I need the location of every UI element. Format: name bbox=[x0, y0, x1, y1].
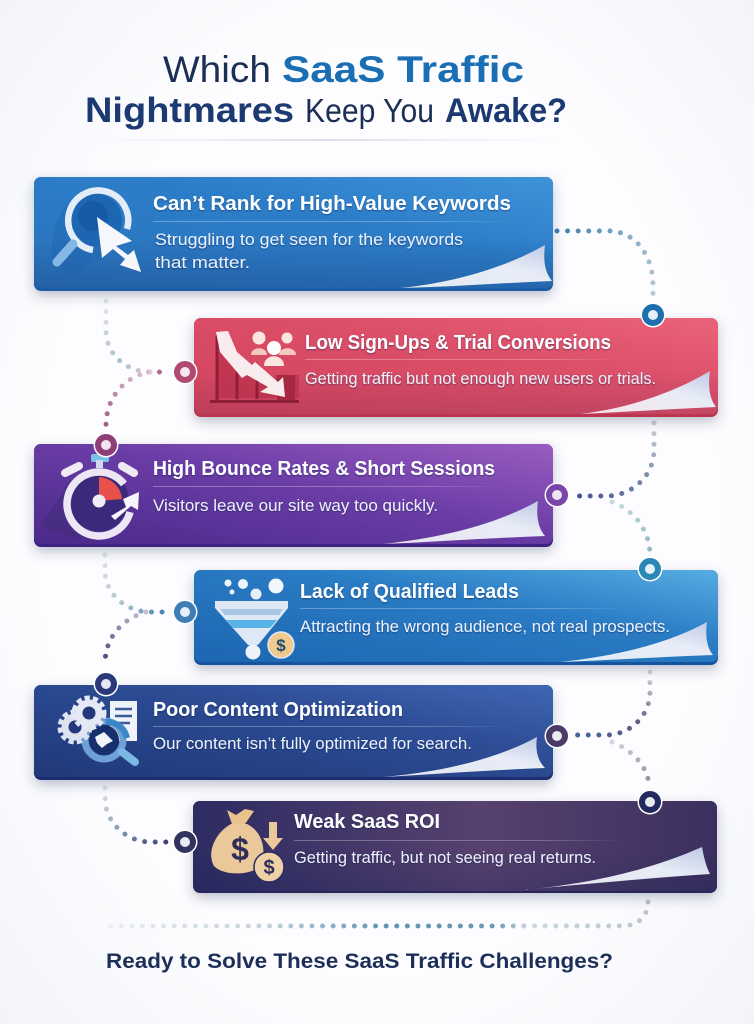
node: card 6 left bbox=[172, 830, 198, 854]
title: SaaS Traffic bbox=[282, 49, 524, 90]
connector: card 5 to card 6 left node bbox=[105, 788, 168, 842]
connector: card 3 to card 4 left node bbox=[105, 555, 168, 612]
title: Nightmares bbox=[85, 91, 294, 130]
description: Attracting the wrong audience, not real prospects. bbox=[300, 618, 670, 636]
description: Our content isn’t fully optimized for search. bbox=[153, 735, 472, 753]
heading: Can’t Rank for High-Value Keywords bbox=[153, 193, 511, 215]
node: card 5 right bbox=[544, 724, 570, 748]
panel: weak saas roi bbox=[193, 801, 717, 893]
connector: card 1 to card 2 left node bbox=[106, 301, 168, 372]
description: Getting traffic, but not seeing real returns. bbox=[294, 849, 596, 867]
icon: magnifier and cursor bbox=[52, 190, 141, 276]
panel: low sign-ups bbox=[194, 318, 718, 417]
closing question: Ready to Solve These SaaS Traffic Challenges? bbox=[106, 950, 613, 973]
connector: card 2 to card 3 right node bbox=[577, 423, 654, 496]
node: card 2 top bbox=[640, 302, 666, 328]
heading: Poor Content Optimization bbox=[153, 699, 403, 721]
title bbox=[85, 49, 567, 141]
heading: Lack of Qualified Leads bbox=[300, 581, 519, 603]
coin symbol: $ bbox=[276, 636, 286, 655]
description: Visitors leave our site way too quickly. bbox=[153, 497, 438, 515]
panel: can't rank bbox=[34, 177, 553, 291]
description: that matter. bbox=[155, 254, 250, 272]
panel: high bounce rates bbox=[34, 444, 553, 547]
description: Getting traffic but not enough new users or trials. bbox=[305, 370, 656, 388]
panel: qualified leads bbox=[194, 570, 718, 665]
heading: Weak SaaS ROI bbox=[294, 811, 440, 833]
node: card 4 top bbox=[638, 556, 662, 582]
connector: card 1 to card 2 bbox=[557, 231, 653, 300]
title: Awake? bbox=[445, 92, 567, 130]
heading: Low Sign-Ups & Trial Conversions bbox=[305, 332, 611, 354]
icon: falling chart and people bbox=[210, 331, 299, 403]
icon: funnel with coin bbox=[215, 578, 294, 660]
icon: gears, document and magnifier bbox=[60, 698, 137, 762]
node: card 3 top bbox=[94, 432, 118, 458]
node: card 2 left bbox=[172, 360, 198, 384]
bag symbol: $ bbox=[231, 831, 249, 867]
title: Keep You bbox=[305, 92, 434, 129]
node: card 5 top bbox=[94, 672, 118, 696]
icon: stopwatch bbox=[41, 454, 139, 538]
connector: card 3 right to card 4 bbox=[612, 502, 650, 556]
title: Which bbox=[163, 49, 271, 90]
connector: card 5 right to card 6 bbox=[612, 742, 649, 786]
coin symbol: $ bbox=[263, 857, 275, 879]
connector: card 2 left to card 3 bbox=[106, 372, 150, 426]
connector: card 4 to card 5 right node bbox=[577, 672, 650, 735]
icon: money bags bbox=[211, 809, 284, 882]
node: card 6 top bbox=[638, 790, 662, 814]
panel: poor content optimization bbox=[34, 685, 553, 780]
node: card 4 left bbox=[172, 600, 198, 624]
connector: card 6 to closing line bbox=[100, 902, 648, 926]
description: Struggling to get seen for the keywords bbox=[155, 231, 463, 249]
node: card 3 right bbox=[544, 482, 570, 508]
connector: card 4 left to card 5 bbox=[105, 612, 146, 664]
heading: High Bounce Rates & Short Sessions bbox=[153, 458, 495, 480]
